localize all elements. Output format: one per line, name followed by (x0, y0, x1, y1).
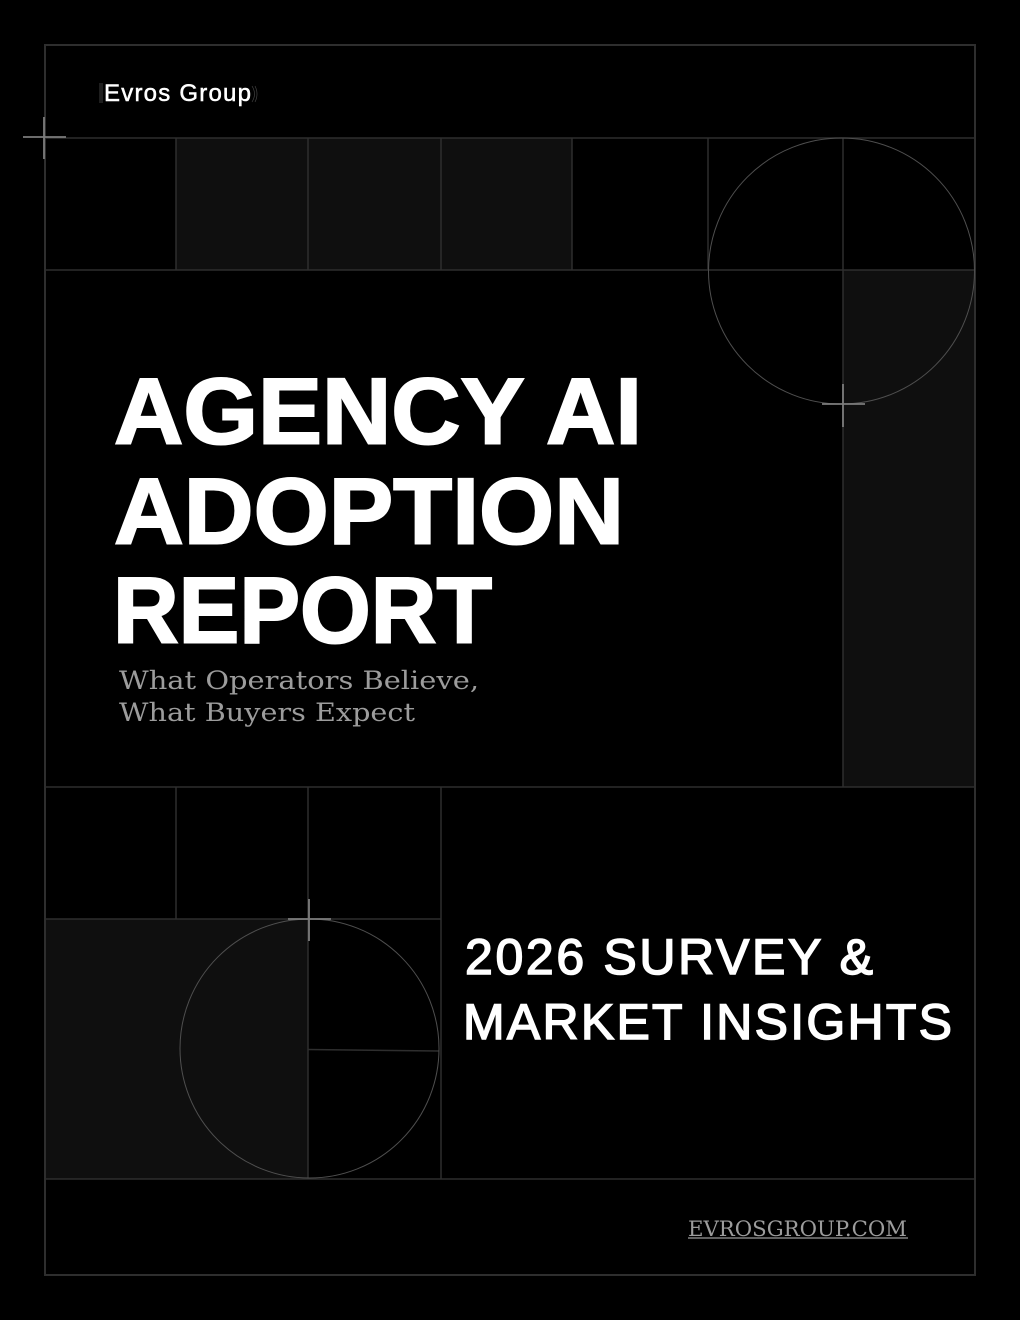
icon: upper circle (708, 138, 974, 404)
brand name: Evros Group (104, 80, 251, 107)
website link: EVROSGROUP.COM (688, 1217, 907, 1242)
title: ADOPTION (114, 458, 624, 564)
title (113, 358, 642, 662)
title: AGENCY AI (114, 358, 642, 464)
survey heading (463, 929, 952, 1050)
panel: shaded grid blocks (45, 138, 975, 1179)
title: REPORT (113, 558, 492, 662)
subtitle (119, 666, 479, 728)
icon: crosshair marks (23, 117, 865, 941)
subtitle: What Buyers Expect (119, 698, 416, 728)
survey heading: MARKET INSIGHTS (463, 994, 952, 1050)
icon: lower circle (180, 919, 439, 1178)
subtitle: What Operators Believe, (119, 666, 479, 696)
survey heading: 2026 SURVEY & (465, 929, 873, 985)
